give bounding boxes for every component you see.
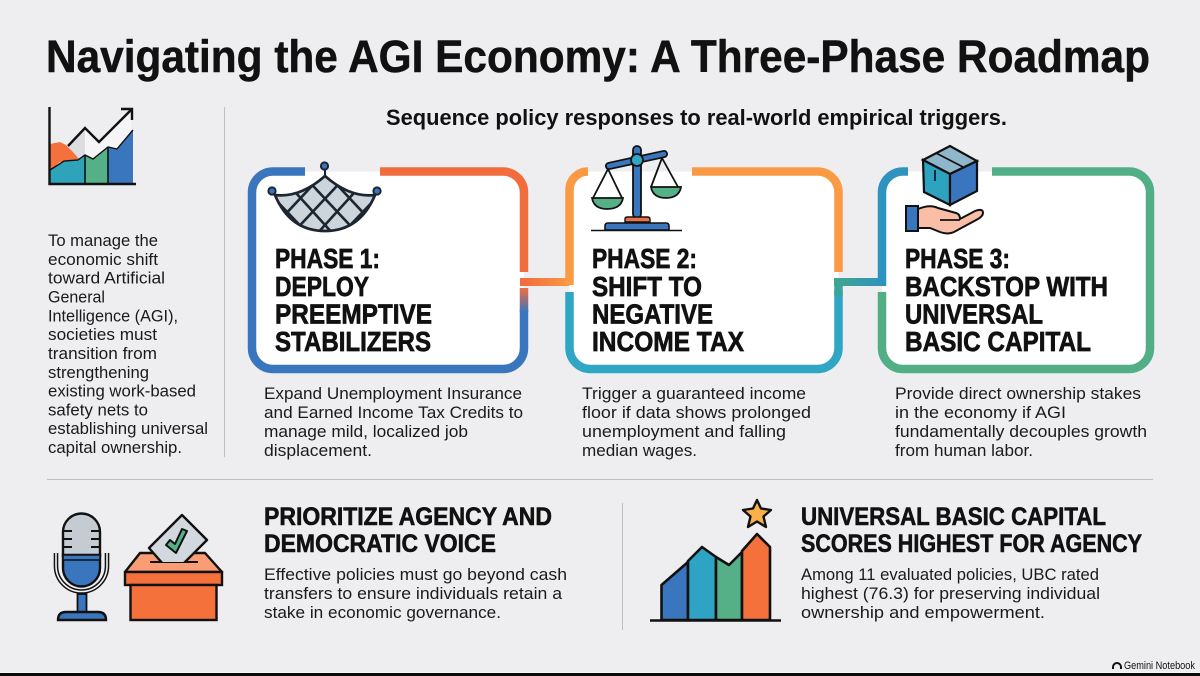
callout: universal basic capital: ownership and empowerment. xyxy=(801,603,1045,622)
icon: growth chart xyxy=(50,107,136,184)
phase 3 description: in the economy if AGI xyxy=(895,403,1066,422)
intro text block: toward Artificial xyxy=(48,268,165,288)
title: Navigating the AGI Economy: A Three-Phase Roadmap xyxy=(46,31,1150,82)
phase 2 heading: NEGATIVE xyxy=(592,298,713,330)
phase 3 heading: BASIC CAPITAL xyxy=(905,326,1091,357)
intro text block: General xyxy=(48,288,105,306)
intro text block: societies must xyxy=(48,325,157,344)
callout: prioritize agency: stake in economic governance. xyxy=(264,603,501,622)
phase 1 heading: DEPLOY xyxy=(275,271,369,302)
phase 2 heading: SHIFT TO xyxy=(592,271,702,302)
phase 1 description: displacement. xyxy=(264,441,372,460)
callout: prioritize agency: Effective policies must go beyond cash xyxy=(264,565,567,584)
icon: ballot box xyxy=(125,515,222,620)
icon: microphone xyxy=(56,514,107,620)
phase 2 description: unemployment and falling xyxy=(582,422,786,441)
phase 3 description xyxy=(895,384,1147,460)
intro text block xyxy=(48,231,208,457)
arrow: connector phase 1 to 2 xyxy=(520,278,574,286)
callout: universal basic capital: UNIVERSAL BASIC CAPITAL xyxy=(801,503,1106,531)
panel: phase 3 xyxy=(882,146,1150,369)
phase 1 heading xyxy=(275,243,432,357)
intro text block: safety nets to xyxy=(48,400,148,420)
phase 3 heading: PHASE 3: xyxy=(905,243,1010,274)
phase 3 heading: BACKSTOP WITH xyxy=(905,271,1108,302)
intro text block: establishing universal xyxy=(48,419,208,438)
intro text block: transition from xyxy=(48,344,157,363)
phase 3 description: fundamentally decouples growth xyxy=(895,422,1147,441)
subheading: Sequence policy responses to real-world empirical triggers. xyxy=(386,105,1007,130)
phase 2 description: Trigger a guaranteed income xyxy=(582,384,806,403)
intro text block: economic shift xyxy=(48,250,158,269)
phase 2 heading: PHASE 2: xyxy=(592,243,697,274)
panel: phase 2 xyxy=(570,146,838,369)
phase 3 heading xyxy=(905,243,1108,357)
phase 2 description: floor if data shows prolonged xyxy=(582,403,811,422)
icon: rising bars with star xyxy=(650,500,781,620)
icon: safety net xyxy=(267,161,382,232)
intro text block: strengthening xyxy=(48,363,149,382)
panel: phase 1 xyxy=(252,162,524,369)
phase 3 description: Provide direct ownership stakes xyxy=(895,384,1141,403)
callout: universal basic capital: SCORES HIGHEST FOR AGENCY xyxy=(801,530,1142,558)
callout: prioritize agency: PRIORITIZE AGENCY AND xyxy=(264,503,552,531)
callout: prioritize agency: DEMOCRATIC VOICE xyxy=(264,530,496,558)
phase 3 heading: UNIVERSAL xyxy=(905,298,1043,330)
intro text block: To manage the xyxy=(48,231,158,250)
phase 3 description: from human labor. xyxy=(895,441,1033,460)
callout: prioritize agency xyxy=(264,503,567,622)
callout: universal basic capital: highest (76.3) for preserving individual xyxy=(801,584,1100,603)
callout: universal basic capital: Among 11 evaluated policies, UBC rated xyxy=(801,565,1099,584)
icon: box over open hand xyxy=(906,146,983,234)
phase 1 heading: STABILIZERS xyxy=(275,326,431,357)
phase 2 description xyxy=(582,384,811,460)
intro text block: existing work-based xyxy=(48,382,196,400)
phase 1 heading: PHASE 1: xyxy=(275,243,380,274)
intro text block: Intelligence (AGI), xyxy=(48,306,178,326)
phase 1 description: manage mild, localized job xyxy=(264,422,468,441)
intro text block: capital ownership. xyxy=(48,438,182,457)
phase 2 description: median wages. xyxy=(582,441,697,460)
phase 1 description: Expand Unemployment Insurance xyxy=(264,384,522,403)
phase 1 heading: PREEMPTIVE xyxy=(275,298,432,330)
phase 2 heading: INCOME TAX xyxy=(592,326,745,357)
arrow: connector phase 2 to 3 xyxy=(834,278,886,286)
phase 1 description: and Earned Income Tax Credits to xyxy=(264,403,523,422)
phase 2 heading xyxy=(592,243,745,357)
callout: universal basic capital xyxy=(801,503,1142,622)
callout: prioritize agency: transfers to ensure individuals retain a xyxy=(264,584,563,603)
phase 1 description xyxy=(264,384,523,460)
icon: balance scale xyxy=(591,146,682,230)
